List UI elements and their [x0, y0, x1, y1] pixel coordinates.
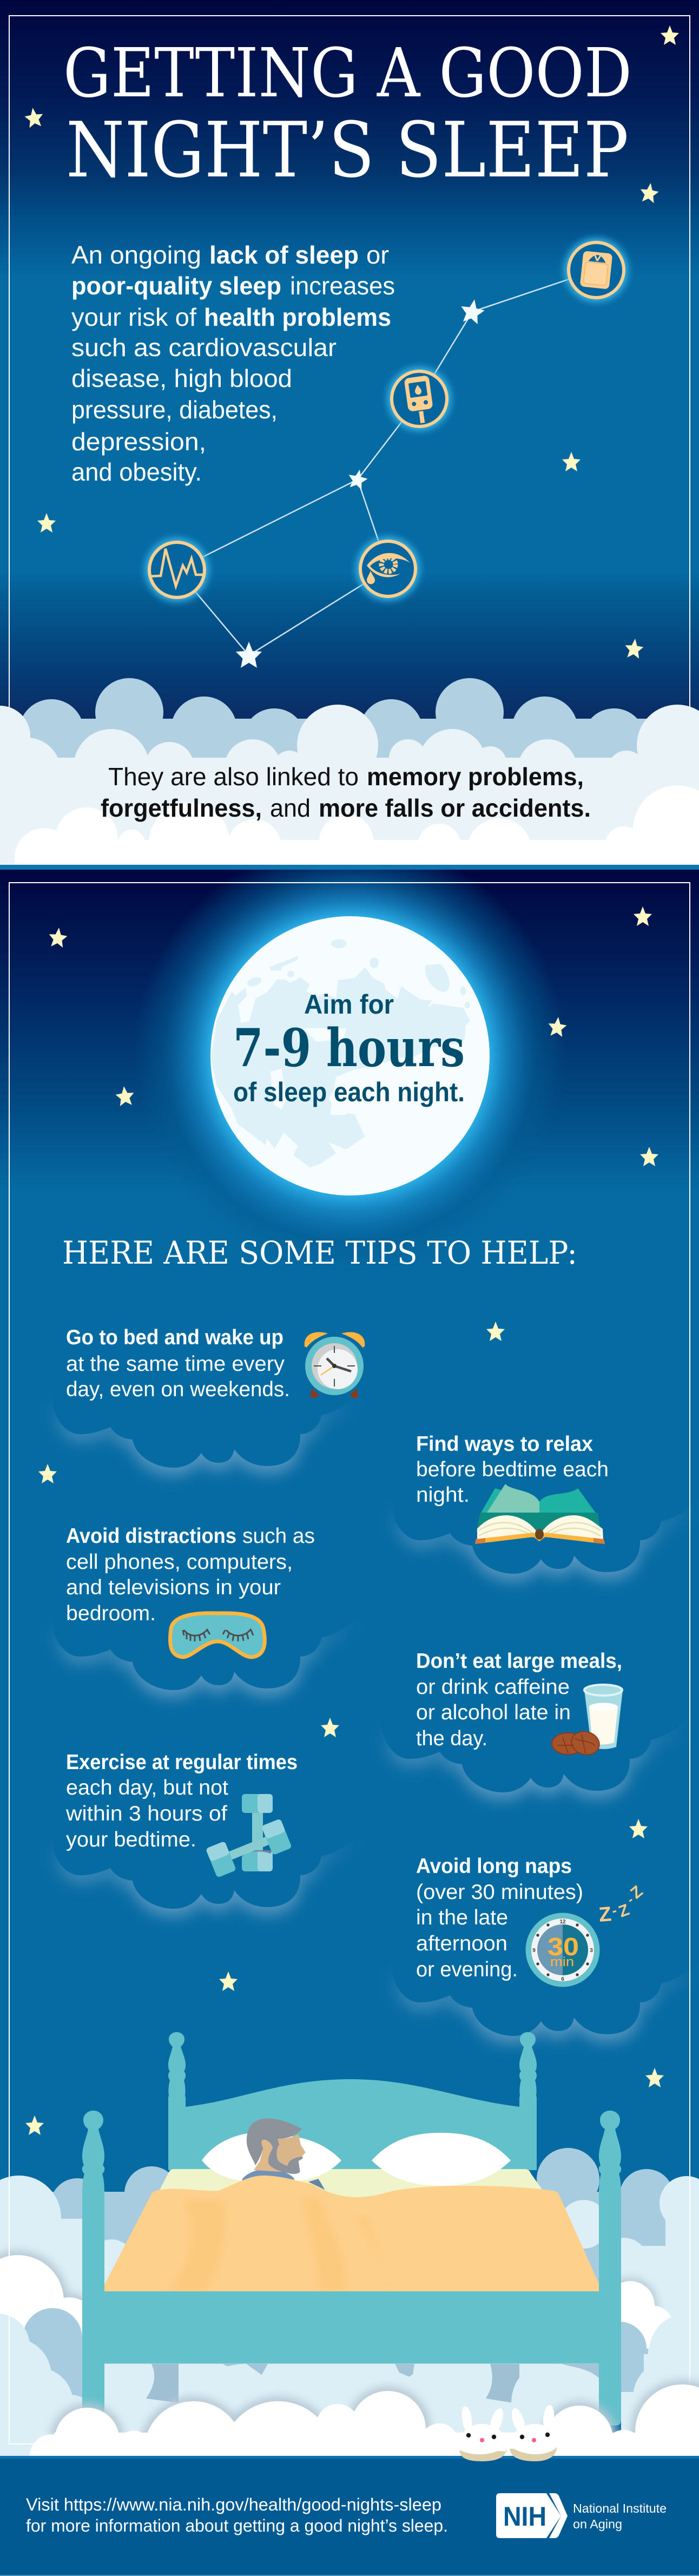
tip: exercise: within 3 hours of — [65, 1802, 227, 1825]
tip: avoid distractions: such as — [242, 1524, 315, 1548]
icon: z-z-z snooze: - — [624, 1892, 636, 1907]
footer text: Visit https://www.nia.nih.gov/health/good-nights-sleep — [26, 2495, 441, 2514]
tip clouds — [27, 1315, 699, 2043]
icon: 30 minute timer: min — [550, 1955, 574, 1969]
icon: glucose meter (diabetes) — [388, 367, 451, 430]
decorative stars: top section — [24, 25, 679, 659]
icon: z-z-z snooze — [598, 1882, 647, 1927]
icon: sleep mask — [170, 1613, 265, 1657]
clouds: shadow under foreground — [48, 2376, 699, 2434]
intro paragraph: health problems: pressure, diabetes, — [71, 396, 278, 424]
tip: relax — [416, 1432, 609, 1507]
constellation stars — [236, 297, 486, 668]
tip: naps: afternoon — [416, 1932, 507, 1955]
tip: large meals — [416, 1650, 622, 1750]
tip: naps: Avoid long naps — [416, 1855, 572, 1878]
tip: relax: Find ways to relax — [416, 1432, 593, 1456]
tip: naps — [416, 1855, 583, 1981]
title — [63, 34, 632, 195]
intro paragraph: health problems: health problems — [204, 303, 391, 331]
mattress — [156, 2169, 548, 2197]
clouds: top section white layer — [15, 785, 699, 864]
tip: bed and wake time — [66, 1326, 290, 1401]
icon: heart rate wave (cardiovascular) — [146, 538, 208, 601]
tip: avoid distractions: and televisions in your — [66, 1576, 281, 1599]
panel: top section sky — [0, 0, 699, 866]
intro paragraph: health problems — [71, 241, 395, 486]
sleeping man — [242, 2118, 325, 2193]
text: linked problems: and — [270, 794, 311, 822]
heading: tips: HERE ARE SOME TIPS TO HELP: — [62, 1234, 577, 1271]
tip: bed and wake time: Go to bed and wake up — [66, 1326, 283, 1349]
tip: exercise: each day, but not — [66, 1776, 228, 1799]
pillow: left — [202, 2133, 341, 2183]
panel: second section sky — [0, 864, 699, 2457]
icon: 30 minute timer: 12 — [559, 1919, 566, 1925]
tip: exercise — [65, 1751, 298, 1851]
footer text — [26, 2495, 448, 2535]
clouds: white mid-level — [0, 2255, 674, 2349]
tip: avoid distractions: cell phones, computers, — [66, 1550, 293, 1574]
icon: bunny slipper right — [509, 2404, 557, 2461]
tip: large meals: or drink caffeine — [416, 1675, 570, 1699]
bed foot posts — [82, 2111, 621, 2426]
tip: relax: before bedtime each — [416, 1458, 609, 1481]
icon: z-z-z snooze: Z — [598, 1903, 612, 1927]
icon: 30 minute timer: 6 — [561, 1976, 564, 1982]
intro paragraph: health problems: An ongoing — [71, 241, 201, 269]
NIH logo: on Aging — [573, 2517, 622, 2531]
footer text: for more information about getting a good night’s sleep. — [26, 2516, 448, 2535]
intro paragraph: health problems: poor-quality sleep — [71, 272, 281, 300]
icon: dumbbells — [206, 1794, 292, 1878]
moon text: aim for 7-9 hours: 7-9 hours — [233, 1017, 465, 1079]
constellation lines — [177, 270, 596, 655]
icon: glass of milk and cookies — [552, 1685, 623, 1758]
icon: bunny slipper left — [459, 2406, 507, 2461]
tip: large meals: or alcohol late in — [416, 1701, 571, 1724]
bed foot rail — [82, 2291, 621, 2363]
bed headboard — [168, 2032, 537, 2170]
tip: naps: in the late — [416, 1906, 508, 1929]
NIH logo: NIH — [503, 2501, 546, 2532]
text: linked problems: forgetfulness, — [101, 794, 262, 822]
text: linked problems: They are also linked to — [108, 763, 359, 791]
NIH logo — [496, 2493, 667, 2538]
intro paragraph: health problems: your risk of — [71, 303, 196, 331]
tip: bed and wake time: day, even on weekends. — [66, 1378, 290, 1401]
title: GETTING A GOOD — [63, 34, 632, 113]
tip: exercise: Exercise at regular times — [66, 1751, 298, 1774]
pillow: right — [372, 2133, 511, 2186]
intro paragraph: health problems: increases — [290, 272, 395, 300]
clouds: top section back layer — [19, 678, 676, 836]
moon text: aim for 7-9 hours: of sleep each night. — [233, 1077, 465, 1107]
text: linked problems: more falls or accidents. — [319, 794, 591, 822]
clouds: shadow below mid-level white clouds — [0, 2251, 657, 2351]
icon: 30 minute timer: 9 — [532, 1948, 536, 1954]
tip: naps: (over 30 minutes) — [416, 1881, 583, 1904]
icon: 30 minute timer — [526, 1913, 599, 1987]
intro paragraph: health problems: depression, — [71, 428, 206, 456]
decorative stars: second section — [25, 906, 664, 2135]
clouds: second middle layer — [0, 2314, 699, 2456]
icon: 30 minute timer: 3 — [590, 1948, 593, 1954]
clouds: bottom section middle layer — [0, 2176, 699, 2456]
icon: z-z-z snooze: Z — [616, 1901, 632, 1921]
clouds: top section front layer — [0, 705, 699, 865]
icon: alarm clock — [305, 1332, 365, 1398]
moon with glow — [146, 870, 554, 1243]
tip: avoid distractions: bedroom. — [66, 1602, 156, 1625]
moon text: aim for 7-9 hours: Aim for — [304, 989, 394, 1020]
icon: tearful eye (depression) — [357, 537, 419, 600]
intro paragraph: health problems: such as cardiovascular — [71, 333, 337, 362]
tip: exercise: your bedtime. — [66, 1828, 196, 1851]
icon: 30 minute timer: 30 — [548, 1933, 579, 1961]
text: linked problems: memory problems, — [367, 763, 584, 791]
clouds: second back layer — [23, 2308, 648, 2404]
title: NIGHT’S SLEEP — [66, 106, 629, 195]
text: linked problems — [101, 763, 591, 822]
clouds: bottom section back layer — [49, 2148, 676, 2365]
blanket — [104, 2176, 599, 2291]
tip: avoid distractions — [66, 1524, 315, 1625]
intro paragraph: health problems: lack of sleep — [209, 241, 359, 269]
tip: large meals: the day. — [416, 1727, 487, 1750]
icon: open book — [475, 1484, 605, 1544]
moon text: aim for 7-9 hours — [233, 989, 465, 1107]
footer band — [0, 2456, 699, 2576]
icon: z-z-z snooze: Z — [627, 1882, 647, 1902]
icon: bathroom scale (obesity) — [565, 239, 628, 301]
icon: z-z-z snooze: - — [609, 1902, 619, 1919]
tip: relax: night. — [416, 1483, 470, 1507]
clouds: foreground white layer — [30, 2384, 699, 2456]
NIH logo: National Institute — [573, 2501, 667, 2515]
intro paragraph: health problems: or — [366, 241, 389, 269]
tip: bed and wake time: at the same time every — [66, 1352, 285, 1376]
moon surface markings — [211, 939, 470, 1167]
intro paragraph: health problems: disease, high blood — [71, 364, 292, 392]
tip: large meals: Don’t eat large meals, — [416, 1650, 622, 1673]
intro paragraph: health problems: and obesity. — [71, 458, 202, 486]
tip: naps: or evening. — [416, 1958, 518, 1981]
tip: avoid distractions: Avoid distractions — [66, 1524, 236, 1548]
